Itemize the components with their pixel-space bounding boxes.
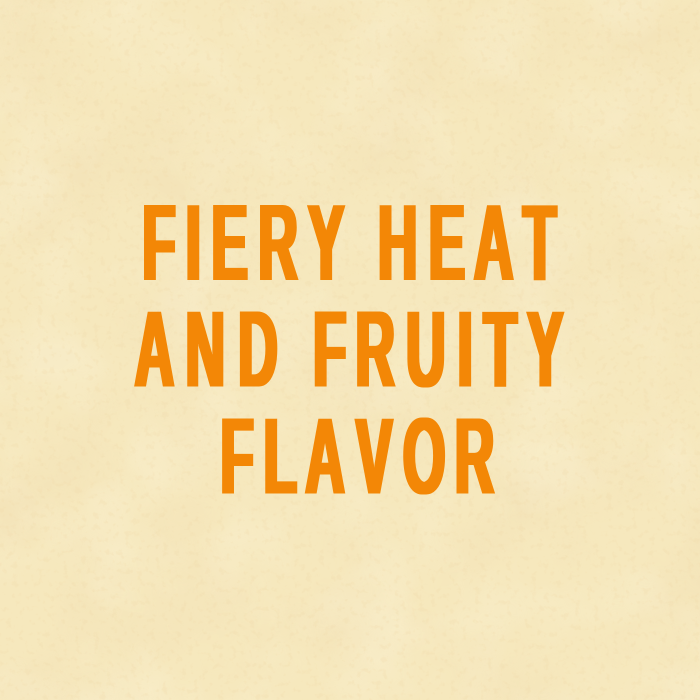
title: FIERY HEAT: [142, 183, 556, 304]
title: FLAVOR: [220, 396, 494, 518]
title: AND FRUITY: [135, 289, 564, 411]
title: [135, 183, 564, 518]
